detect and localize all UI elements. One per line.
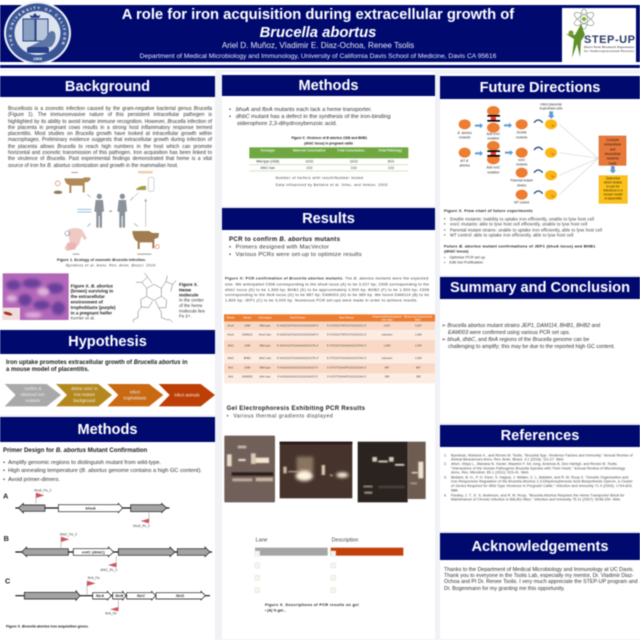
figure: PCR text and primer table: 887 bbox=[416, 366, 421, 370]
figures 2 and 3: placenta histology and heme: the extracellular bbox=[71, 294, 105, 299]
flow chart and future notes: mutation bbox=[487, 170, 500, 174]
gene diagrams A B C: C bbox=[5, 576, 11, 585]
text block: conclusions: EAM003 were confirmed using various PCR set ups. bbox=[448, 330, 570, 336]
list: references: Iron-Responsive Regulation of the Brucella Abortus 2,3-Dihydroxybenzoic Acid Biosynthesis Operon, a Cluster bbox=[451, 480, 633, 484]
gene diagrams A B C: fbrA_Rv bbox=[105, 612, 117, 616]
flow chart and future notes: mutation bbox=[487, 137, 500, 141]
flow chart and future notes: mutants bbox=[516, 135, 528, 139]
table: virulence in pregnant cattle: 1/10 bbox=[388, 166, 394, 170]
list: references: 3. bbox=[444, 475, 447, 479]
figures 2 and 3: placenta histology and heme bbox=[2, 272, 206, 323]
figure: PCR text and primer table: BHB1 bbox=[244, 356, 251, 360]
gene diagrams A B C: fbrB bbox=[115, 593, 124, 598]
flow chart and future notes: extracellular bbox=[604, 143, 621, 147]
flow chart and future notes: Add vceC bbox=[486, 165, 501, 169]
flow chart and future notes: Double bbox=[517, 131, 527, 135]
figure: PCR text and primer table: 389 bbox=[385, 375, 390, 379]
flow chart and future notes: which strains bbox=[604, 181, 623, 185]
gene diagrams A B C: fbrD bbox=[176, 593, 184, 598]
table: virulence in pregnant cattle: 10/10 bbox=[305, 160, 314, 164]
figure: PCR text and primer table: 1,800 bp; JEP1 (C) to be 3,000 bp. Numerous PCR set-ups were made in order to achieve results. bbox=[225, 298, 418, 302]
gene diagrams A B C: Figure X. Brucella abortus iron acquisition genes. bbox=[6, 624, 89, 628]
flow chart and future notes: vceC mutants: able to lyse host cell efficiently, unable to lyse host cell bbox=[450, 222, 587, 227]
logo: STEP-UP: STEP-UP bbox=[584, 34, 635, 46]
figure: PCR text and primer table: 5'-AGGAAGGGCCGGGCAAGT-3' bbox=[277, 375, 318, 379]
figure: PCR text and primer table: 1,000 bbox=[415, 333, 422, 337]
figure: PCR text and primer table: 2308 bbox=[244, 366, 251, 370]
flow chart and future notes: and bbox=[610, 147, 616, 151]
list: references: Web. bbox=[451, 489, 458, 493]
figure: PCR text and primer table: size. We anticipated 2308 corresponding to the bhuA locus (A) to be 3,027 bp; 2308 corresponding to the bbox=[225, 282, 429, 286]
list: references: Paulley, J. T., E. S. Anderson, and R. M. Roop. "Brucella Abortus Requires the Heme Transporter BhuA for bbox=[451, 493, 625, 497]
flow chart and future notes: WT control: able to uptake iron efficiently, able to lyse host cell bbox=[450, 233, 573, 238]
process arrows: experimental plan: iron mutant bbox=[74, 392, 96, 397]
panel: methods left bbox=[0, 417, 215, 640]
figure: PCR text and primer table: Strain bbox=[243, 316, 252, 320]
title bbox=[122, 7, 515, 41]
heading: future directions: Future Directions bbox=[480, 80, 600, 96]
figure: PCR text and primer table: Wild-type bbox=[259, 324, 271, 328]
figure: PCR text and primer table: fbrA bbox=[228, 366, 233, 370]
flow chart and future notes: Edit Gel Purification bbox=[449, 261, 483, 265]
gene diagrams A B C: B bbox=[4, 534, 9, 543]
list: references: of Genes Required for Wild-Type Virulence in Pregnant Cattle." Infection and Immunity 71.4 (2003): 1794-803. bbox=[451, 484, 633, 488]
list: references: 2. bbox=[444, 462, 447, 466]
panel: background bbox=[0, 71, 215, 329]
figure: gels and lane table: Lane bbox=[256, 538, 268, 544]
figures 2 and 3: placenta histology and heme: trophoblasts (purple) bbox=[71, 305, 116, 310]
table: virulence in pregnant cattle: 1/10 bbox=[306, 166, 313, 170]
process arrows: experimental plan: trophoblasts bbox=[124, 395, 146, 400]
figure: PCR text and primer table: unknown bbox=[382, 333, 393, 337]
figure: PCR text and primer table: Strain bbox=[227, 316, 235, 320]
table: virulence in pregnant cattle bbox=[248, 136, 410, 188]
flow chart and future notes: Add vceC bbox=[486, 132, 501, 136]
figure: PCR text and primer table bbox=[223, 236, 436, 384]
flow chart and future notes: WT control bbox=[514, 200, 530, 204]
logo: STEP-UP: Short-Term Research Experience bbox=[584, 45, 634, 49]
flow chart and future notes: loads bbox=[609, 161, 617, 165]
table: virulence in pregnant cattle: dhbC::kan bbox=[260, 166, 275, 170]
heading: background: Background bbox=[65, 78, 150, 94]
flow chart and future notes: Compare bbox=[606, 138, 619, 142]
figure: PCR text and primer table: 5'-AAGCGGTGGCCGGGCAAAT-3' bbox=[277, 333, 319, 337]
figure: PCR text and primer table: Primers designed with MacVector bbox=[236, 245, 329, 251]
text block: background: Brucellosis is a zoonotic infection caused by the gram-negative bacterial genus Brucella (Figure 1). The immunoevasive nature of this persistent intracellular pathogen is highlighted by its ability to avoid innate immune recognition. However, Brucella infection of the placenta in pregnant cows results in a strong host inflammatory response termed placentitis. Most studies on Brucella growth have looked at intracellular growth within macrophages. Preliminary evidence suggests that extracellular growth during infection of the placenta allows Brucella to reach high numbers in the host which can promote horizontal and zoonotic transmission of this pathogen. Iron acquisition has been linked to the virulence of Brucella. Past experimental findings demonstrated that heme is a vital source of iron for B. abortus colonization and growth in the mammalian host. bbox=[8, 106, 212, 169]
figure: PCR text and primer table: 887 bbox=[385, 366, 390, 370]
flow chart and future notes: Parental mutant strains: unable to uptake iron efficiently, able to lyse host cell bbox=[450, 227, 602, 232]
figure: PCR text and primer table: PCR to confirm B. abortus mutants bbox=[229, 236, 341, 243]
table: virulence in pregnant cattle: Maternal Colonization bbox=[293, 149, 326, 153]
table: virulence in pregnant cattle: Number of heifers with result/Number tested bbox=[276, 176, 363, 180]
flow chart and future notes: of placentitis bbox=[604, 197, 622, 201]
flow chart and future notes: • bbox=[444, 227, 446, 232]
heading: methods bbox=[222, 75, 435, 96]
figure: gels and lane table: Figure X. Descriptions of PCR results on gel bbox=[265, 603, 359, 607]
gene diagrams A B C: bhuA_Rv_3 bbox=[133, 524, 150, 528]
text block: acknowledgements: Ochoa and PI Dr. Renee Tsolis. I very much appreciate the STEP-UP program and bbox=[444, 579, 638, 585]
table: virulence in pregnant cattle: 1/10 bbox=[351, 166, 357, 170]
figure: PCR text and primer table: Rev Primer bbox=[339, 316, 355, 320]
figures 2 and 3: placenta histology and heme: environment of bbox=[71, 299, 103, 304]
figure 1: ecology of brucella: Figure 1. Ecology of zoonotic Brucella infection. bbox=[57, 258, 146, 262]
heading: references bbox=[440, 425, 640, 447]
text block: acknowledgements: Thanks to the Department of Medical Microbiology and Immunology at UC Davis. bbox=[444, 566, 634, 572]
text block: conclusions: ➢ bhuA, dhbC, and fbrA regions of the Brucella genome can be bbox=[442, 337, 589, 343]
figure: PCR text and primer table: Figure X: PCR confirmation of Brucella abortus mutants. The B. abortus mutants were the expected bbox=[225, 277, 428, 281]
flow chart and future notes: • bbox=[444, 222, 446, 227]
gene diagrams A B C: dhbC_Rv_3 bbox=[100, 568, 117, 572]
authors: Ariel D. Muñoz, Vladimir E. Diaz-Ochoa, Renee Tsolis bbox=[222, 41, 414, 50]
heading: methods bbox=[0, 417, 215, 442]
figure: PCR text and primer table: Wild-type bbox=[259, 344, 271, 348]
figure: PCR text and primer table: Observed (expected) bbox=[404, 315, 432, 319]
figure: PCR text and primer table: 1,000 bbox=[415, 356, 422, 360]
figure: PCR text and primer table: 5'-CTGGGTGGAAAGGCGTAC-3' bbox=[327, 344, 367, 348]
figure: PCR text and primer table: dhbC bbox=[227, 356, 234, 360]
figure: PCR text and primer table: fbrA bbox=[228, 375, 233, 379]
text block: acknowledgements: Dr. Bogenmann for my granting me this opportunity. bbox=[444, 586, 565, 592]
heading: methods: Methods bbox=[298, 78, 358, 94]
panel: references bbox=[440, 425, 640, 531]
figure: PCR text and primer table: Fwd Primer bbox=[290, 316, 306, 320]
figure: PCR text and primer table: 3,027 bbox=[384, 324, 391, 328]
figure: PCR text and primer table: bhuA bbox=[228, 324, 234, 328]
text block: acknowledgements: Thank you to everyone in the Tsolis Lab, especially my mentor, Dr. Vladimir Diaz- bbox=[444, 573, 634, 579]
text block: conclusions bbox=[442, 322, 615, 350]
text block: hypothesis statement: Iron uptake promotes extracellular growth of Brucella abortus in bbox=[6, 360, 187, 366]
list: references: Annu. Rev. Microbiol. 65.1 (2011): 523-41. Web. bbox=[451, 471, 529, 475]
flow chart and future notes: • bbox=[444, 261, 446, 265]
heading: summary and conclusion: Summary and Conclusion bbox=[450, 280, 630, 296]
process arrows: experimental plan: delete vceC in bbox=[71, 386, 98, 391]
figure: PCR text and primer table: 5'-GTCTTGAAATCGGGCGAA-3' bbox=[327, 366, 367, 370]
flow chart and future notes: • bbox=[444, 255, 446, 259]
figures 2 and 3: placenta histology and heme: Fe 2+. bbox=[179, 314, 192, 319]
header banner bbox=[0, 0, 640, 70]
figure: PCR text and primer table: Various PCRs were set-up to optimize results bbox=[236, 252, 362, 258]
figures 2 and 3: placenta histology and heme: of the heme bbox=[179, 303, 203, 308]
heading: hypothesis: Hypothesis bbox=[68, 334, 147, 350]
figures 2 and 3: placenta histology and heme: in a pregnant heifer bbox=[71, 310, 112, 315]
heading: results: Results bbox=[302, 211, 355, 227]
text block: conclusions: challenging to amplify; this may be due to the reported high GC content. bbox=[448, 344, 615, 350]
table: virulence in pregnant cattle: Fetal Pathology bbox=[379, 149, 402, 153]
text block: acknowledgements bbox=[444, 566, 638, 592]
figure: PCR text and primer table: corresponding to the fbrA locus (G) to be 887 bp; EAM003 (H) to be 389 bp. We found DAM114 (B) to be bbox=[225, 293, 429, 297]
list: references: Maintenance of Chronic Infection in BALB/c Mice." Infection and Immunity 75.11 (2007): 5248-254. Web. bbox=[451, 498, 621, 502]
figure: PCR text and primer table: (bp) bbox=[415, 318, 420, 322]
gene diagrams A B C bbox=[2, 488, 213, 630]
figure: PCR text and primer table: Expected/Anticipated bbox=[373, 315, 402, 319]
bullet list: mutants: siderophore 2,3-dihydroxybenzoic acid. bbox=[237, 121, 337, 127]
figure: PCR text and primer table: DAM114 bbox=[242, 333, 253, 337]
flow chart and future notes: (dhbC locus) bbox=[444, 249, 469, 254]
flow chart and future notes: Nu bbox=[551, 154, 555, 156]
figure 1: ecology of brucella: Byndloss et al. Annu. Rev. Anim. Biosci. 2016 bbox=[66, 263, 156, 267]
figures 2 and 3: placenta histology and heme: molecule bbox=[179, 293, 199, 298]
bullet list: primer design bbox=[2, 460, 202, 482]
flow chart and future notes bbox=[443, 102, 628, 265]
flow chart and future notes: trophoblast cells bbox=[540, 107, 563, 111]
figure: PCR text and primer table: 2308 bbox=[244, 324, 251, 328]
process arrows: experimental plan: obtained iron bbox=[21, 392, 45, 397]
list: references bbox=[444, 453, 634, 502]
figures 2 and 3: placenta histology and heme: Heme bbox=[179, 287, 192, 292]
table: virulence in pregnant cattle: Genotype bbox=[260, 149, 275, 153]
gene diagrams A B C: fbrA_Fw bbox=[88, 576, 100, 580]
gene diagrams A B C: bhuA bbox=[86, 506, 96, 511]
figure: PCR text and primer table: size (bp) bbox=[381, 318, 393, 322]
list: references: Animal Biosciences Annu. Rev. Anim. Biosci. 4.1 (2016): 111-27. Web. bbox=[451, 457, 564, 461]
table: virulence in pregnant cattle: Wild-type (2308) bbox=[256, 159, 279, 163]
panel: summary and conclusion bbox=[440, 277, 640, 423]
figure: gels and lane table: Various thermal gradients displayed bbox=[233, 413, 333, 419]
flow chart and future notes: mutants bbox=[516, 163, 528, 167]
figure: PCR text and primer table: Genotype bbox=[258, 316, 272, 320]
list: references: 4. bbox=[444, 493, 447, 497]
heading: hypothesis bbox=[0, 330, 215, 354]
flow chart and future notes: mouse model bbox=[604, 193, 623, 197]
figure: PCR text and primer table: dhbC locus (D) to be 1,569 bp; BHB1 (E) to be approximately 2,500 bp; BHB2 (F) to be 1,500 bp; 2308 bbox=[225, 288, 429, 292]
figure: gels and lane table: • (A) % gel... bbox=[265, 609, 286, 613]
title: Brucella abortus bbox=[260, 25, 376, 41]
icon: university seal bbox=[3, 2, 72, 64]
table: virulence in pregnant cattle: 10/10 bbox=[350, 160, 358, 164]
bullet list: mutants: • bhuA and fbrA mutants each lack a heme transporter. bbox=[229, 106, 372, 112]
figure: PCR text and primer table: • bbox=[229, 252, 231, 258]
heading: acknowledgements bbox=[440, 533, 640, 560]
list: references: 1. bbox=[444, 453, 447, 457]
table: virulence in pregnant cattle: Figure X. Virulence of B abortus 2308 and BHB1 bbox=[291, 136, 367, 140]
flow chart and future notes: Nu bbox=[551, 126, 555, 128]
flow chart and future notes: vceC bbox=[518, 158, 526, 162]
process arrows: experimental plan: mutants bbox=[25, 398, 40, 403]
figure: PCR text and primer table: 389 bbox=[416, 375, 421, 379]
list: references: Byndloss, Mariana X., and Renee M. Tsolis. "Brucella Spp. Virulence Factors and Immunity." Annual Review of bbox=[451, 453, 633, 457]
table: virulence in pregnant cattle: (dhbC locus) in pregnant cattle bbox=[304, 142, 353, 146]
figure: PCR text and primer table: Wild-type bbox=[259, 366, 271, 370]
flow chart and future notes: • bbox=[444, 216, 446, 221]
text block: hypothesis statement bbox=[6, 358, 188, 374]
figure 1: ecology of brucella: ∞ bbox=[109, 209, 112, 214]
flow chart and future notes: Infect placental bbox=[540, 102, 562, 106]
figure: PCR text and primer table: 2308 bbox=[244, 344, 251, 348]
gene diagrams A B C: fbrA bbox=[96, 593, 104, 598]
table: virulence in pregnant cattle: 8/10 bbox=[388, 160, 394, 164]
flow chart and future notes: Figure X. Flow chart of future experiments bbox=[444, 208, 533, 213]
icon: university seal: 1868 bbox=[33, 56, 43, 61]
flow chart and future notes: • bbox=[444, 233, 446, 238]
flow chart and future notes: WT B. bbox=[460, 159, 469, 163]
heading: summary and conclusion bbox=[440, 277, 640, 299]
flow chart and future notes: abortus bbox=[459, 164, 470, 168]
figure: gels and lane table: Gel Electrophoresis Exhibiting PCR Results bbox=[227, 406, 366, 412]
process arrows: experimental plan bbox=[4, 383, 216, 408]
flow chart and future notes: Determine bbox=[606, 177, 621, 181]
figure: PCR text and primer table: unknown bbox=[382, 356, 393, 360]
gene diagrams A B C: fbrC bbox=[137, 593, 145, 598]
figures 2 and 3: placenta histology and heme: In the center bbox=[179, 298, 204, 303]
gene diagrams A B C: A bbox=[3, 491, 9, 500]
logo: STEP-UP: for Underrepresented Persons bbox=[584, 49, 634, 53]
figure: PCR text and primer table: 1,569 bbox=[384, 344, 391, 348]
figure: PCR text and primer table: bhuA bbox=[228, 333, 234, 337]
bullet list: primer design: • Avoid primer-dimers. bbox=[3, 476, 60, 482]
heading: results bbox=[222, 208, 435, 230]
process arrows: experimental plan: background bbox=[73, 398, 96, 403]
bullet list: primer design: • Amplify genomic regions to distinguish mutant from wild-type. bbox=[3, 460, 161, 466]
flow chart and future notes: mutants bbox=[459, 135, 471, 139]
text block: hypothesis statement: a mouse model of placentitis. bbox=[6, 367, 89, 373]
bullet list: mutants bbox=[228, 106, 391, 127]
figure: gels and lane table: • bbox=[227, 413, 229, 419]
figure: PCR text and primer table: 5'-AAGCGGTGGCCGGGCAAAT-3' bbox=[277, 324, 319, 328]
panel: hypothesis bbox=[0, 330, 215, 415]
figure: PCR text and primer table: dhbC::kan bbox=[259, 356, 272, 360]
figure: gels and lane table bbox=[224, 404, 426, 614]
figure 1: ecology of brucella bbox=[53, 170, 160, 268]
flow chart and future notes: Parental mutant bbox=[511, 179, 533, 183]
figure: PCR text and primer table: 5'-GTGGGTTATCCTGGGCGC-3' bbox=[327, 324, 367, 328]
figure: PCR text and primer table: 5'-AAGCGGTGGAAAAGGCGTA-3' bbox=[277, 356, 319, 360]
gene diagrams A B C: dhbC_Fw_3 bbox=[60, 532, 77, 536]
table: virulence in pregnant cattle: Data influenced by Bellaire et al. Infec. and Immun. 2003 bbox=[276, 183, 387, 187]
figure: PCR text and primer table: dhbC bbox=[227, 344, 234, 348]
title: A role for iron acquisition during extracellular growth of bbox=[122, 7, 514, 23]
table: virulence in pregnant cattle: Fetal Colonization bbox=[337, 149, 365, 153]
figure: PCR text and primer table: 5'-CTGGGTGGAAAGGCGTAC-3' bbox=[327, 356, 367, 360]
heading: methods: Methods bbox=[78, 422, 138, 438]
flow chart and future notes: intracellular bbox=[605, 152, 621, 156]
logo: STEP-UP bbox=[561, 7, 637, 63]
affiliation: Department of Medical Microbiology and Immunology, University of California Davis School of Medicine, Davis CA 95616 bbox=[140, 53, 496, 60]
figure: PCR text and primer table: 1,500 bbox=[415, 344, 422, 348]
panel: acknowledgements bbox=[440, 533, 640, 639]
figure: PCR text and primer table: EAM003 bbox=[242, 375, 253, 379]
panel: results bbox=[222, 208, 435, 639]
panel: future directions bbox=[440, 74, 640, 275]
flow chart and future notes: B. abortus bbox=[457, 131, 472, 135]
flow chart and future notes: Future B. abortus mutant confirmations of JEP1 (bhuA locus) and BHB1 bbox=[444, 243, 596, 248]
list: references: Atluri, Vidya L., Mariana N. Xavier, Maarten F. De Jong, Andreas B. Den Hartigh, and Renee M. Tsolis. bbox=[451, 462, 618, 466]
process arrows: experimental plan: infect animals bbox=[174, 393, 200, 398]
list: references: Bellaire, B. H., P. H. Elzer, S. Hagius, J. Walker, C. L. Baldwin, and R. M. Roop II. "Genetic Organization and bbox=[451, 475, 628, 479]
figures 2 and 3: placenta histology and heme: molecule lies bbox=[179, 308, 206, 313]
subheading: primer design: Primer Design for B. abortus Mutant Confirmation bbox=[3, 446, 147, 454]
heading: future directions bbox=[440, 76, 640, 99]
figure: PCR text and primer table: 5'-GTGGGTTATCCTGGGCGC-3' bbox=[327, 333, 367, 337]
figure: PCR text and primer table: 3,027 bbox=[415, 324, 422, 328]
flow chart and future notes: Double mutants: inability to uptake iron efficiently, unable to lyse host cell bbox=[450, 216, 594, 221]
figures 2 and 3: placenta histology and heme: Figure X. bbox=[179, 282, 198, 287]
figure: PCR text and primer table: 5'-AGGAAGGGCCGGGCAAGT-3' bbox=[277, 366, 318, 370]
flow chart and future notes: strains bbox=[517, 183, 527, 187]
figure: PCR text and primer table: fbrA::kan bbox=[260, 375, 271, 379]
heading: references: References bbox=[501, 428, 579, 444]
figure: PCR text and primer table: • bbox=[229, 245, 231, 251]
flow chart and future notes: bacterial bbox=[607, 157, 619, 161]
heading: background bbox=[0, 76, 215, 97]
figures 2 and 3: placenta histology and heme: (brown) surviving in bbox=[71, 289, 113, 294]
figure: PCR text and primer table: 5'-AAGCGGTGGAAAAGGCGTA-3' bbox=[277, 344, 319, 348]
figure: gels and lane table: Description bbox=[332, 538, 358, 544]
heading: acknowledgements: Acknowledgements bbox=[471, 538, 609, 554]
text block: conclusions: ➢ Brucella abortus mutant strains JEP1, DAM114, BHB1, BHB2 and bbox=[442, 323, 600, 329]
process arrows: experimental plan: infect bbox=[130, 389, 141, 394]
panel: methods middle bbox=[222, 72, 435, 206]
flow chart and future notes: Optimize PCR set up bbox=[449, 255, 485, 259]
bullet list: primer design: • High annealing temperature (B. abortus genome contains a high GC content). bbox=[3, 468, 202, 474]
flow chart and future notes: to use for bbox=[606, 185, 620, 189]
gene diagrams A B C: entC (dhbC) bbox=[82, 549, 105, 554]
flow chart and future notes: Nu bbox=[551, 196, 555, 198]
flow chart and future notes: Nu bbox=[551, 177, 555, 179]
flow chart and future notes: infections in a bbox=[603, 189, 623, 193]
figures 2 and 3: placenta histology and heme: Kerrier et al. bbox=[71, 315, 95, 320]
figure: PCR text and primer table: 5'-GTCTTGAAATCGGGCGAA-3' bbox=[327, 375, 367, 379]
figures 2 and 3: placenta histology and heme: Figure X. B. abortus bbox=[71, 283, 114, 288]
gene diagrams A B C: bhuA_Fw_3 bbox=[34, 488, 51, 492]
figure: PCR text and primer table: bhuA::kan bbox=[259, 333, 272, 337]
list: references: "Interactions of the Human Pathogenic Brucella Species with Their Hosts." Annual Review of Microbiology bbox=[451, 466, 625, 470]
process arrows: experimental plan: confirm & bbox=[24, 386, 42, 391]
bullet list: mutants: • dhbC mutant has a defect in the synthesis of the iron-binding bbox=[229, 114, 391, 120]
